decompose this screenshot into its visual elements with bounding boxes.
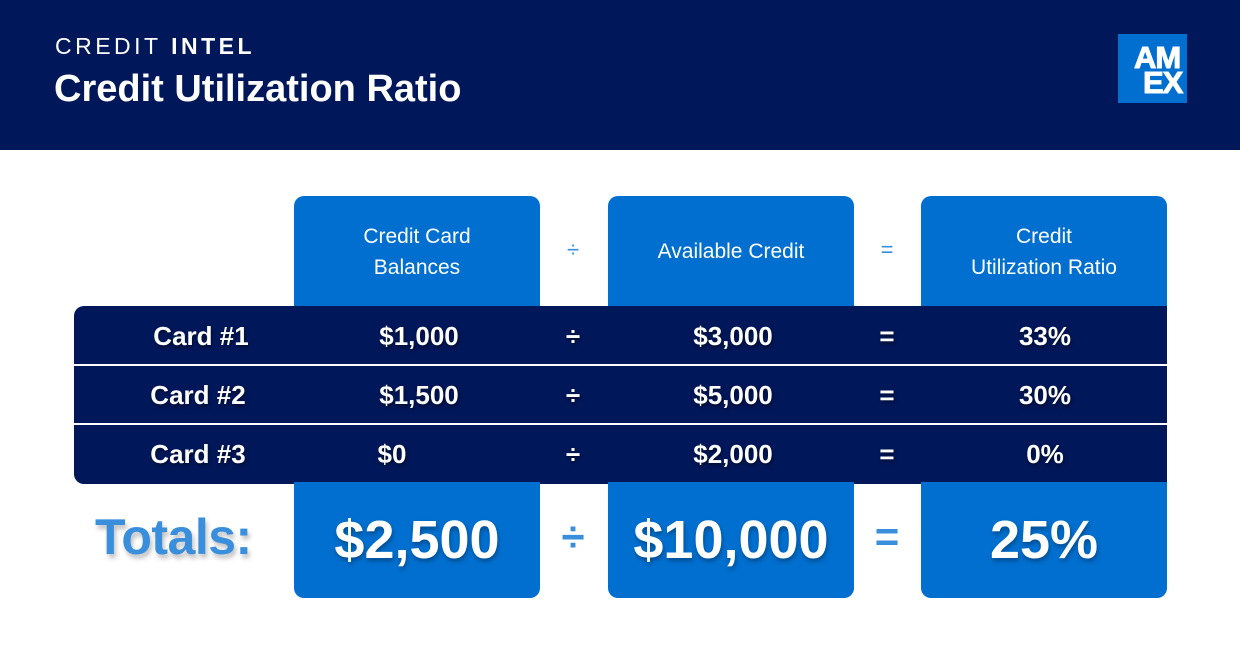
logo <box>1118 34 1187 103</box>
row: card 2: = <box>879 380 895 410</box>
row: card 1: = <box>879 321 895 351</box>
total box: available <box>608 482 854 598</box>
total box: ratio: 25% <box>990 510 1098 570</box>
row: card 3: $0 <box>378 439 406 469</box>
header box: ratio <box>921 196 1167 308</box>
row: card 1: $3,000 <box>693 321 773 351</box>
row: card 1: 33% <box>1019 321 1071 351</box>
logo: AM <box>1134 40 1180 75</box>
row: card 2: ÷ <box>566 380 580 410</box>
operator: equals: = <box>881 237 893 262</box>
logo: EX <box>1143 65 1182 100</box>
row: card 3: = <box>879 439 895 469</box>
title: Credit Utilization Ratio <box>54 68 461 110</box>
row: card 2: $5,000 <box>693 380 773 410</box>
row: card 3: 0% <box>1026 439 1064 469</box>
header box: balances <box>294 196 540 308</box>
header box: balances: Credit Card <box>363 225 471 248</box>
total operator divide: ÷ <box>561 513 585 560</box>
row: card 2: $1,500 <box>379 380 459 410</box>
row: card 3 <box>150 439 1066 470</box>
row: card 2: 30% <box>1019 380 1071 410</box>
row: card 1 <box>153 321 1072 352</box>
header box: available: Available Credit <box>658 240 804 263</box>
total box: available: $10,000 <box>633 510 829 570</box>
row: card 3: ÷ <box>566 439 580 469</box>
total box: ratio <box>921 482 1167 598</box>
table <box>74 306 1167 484</box>
totals label: Totals: <box>95 509 252 565</box>
row: card 3: $2,000 <box>693 439 773 469</box>
row: card 1: $1,000 <box>379 321 459 351</box>
row: card 3: Card #3 <box>150 439 246 469</box>
total box: balances: $2,500 <box>334 510 500 570</box>
header box: available <box>608 196 854 308</box>
header bar <box>0 0 1240 150</box>
total operator equals: = <box>875 513 899 560</box>
header box: ratio: Credit <box>1016 225 1072 248</box>
row: card 1: ÷ <box>566 321 580 351</box>
row: card 2: Card #2 <box>150 380 246 410</box>
operator: divide: ÷ <box>567 237 579 262</box>
kicker: CREDIT INTEL <box>55 33 255 59</box>
row: card 1: Card #1 <box>153 321 249 351</box>
header box: balances: Balances <box>374 256 460 279</box>
header box: ratio: Utilization Ratio <box>971 256 1117 279</box>
row: card 2 <box>150 380 1072 410</box>
total box: balances <box>294 482 540 598</box>
